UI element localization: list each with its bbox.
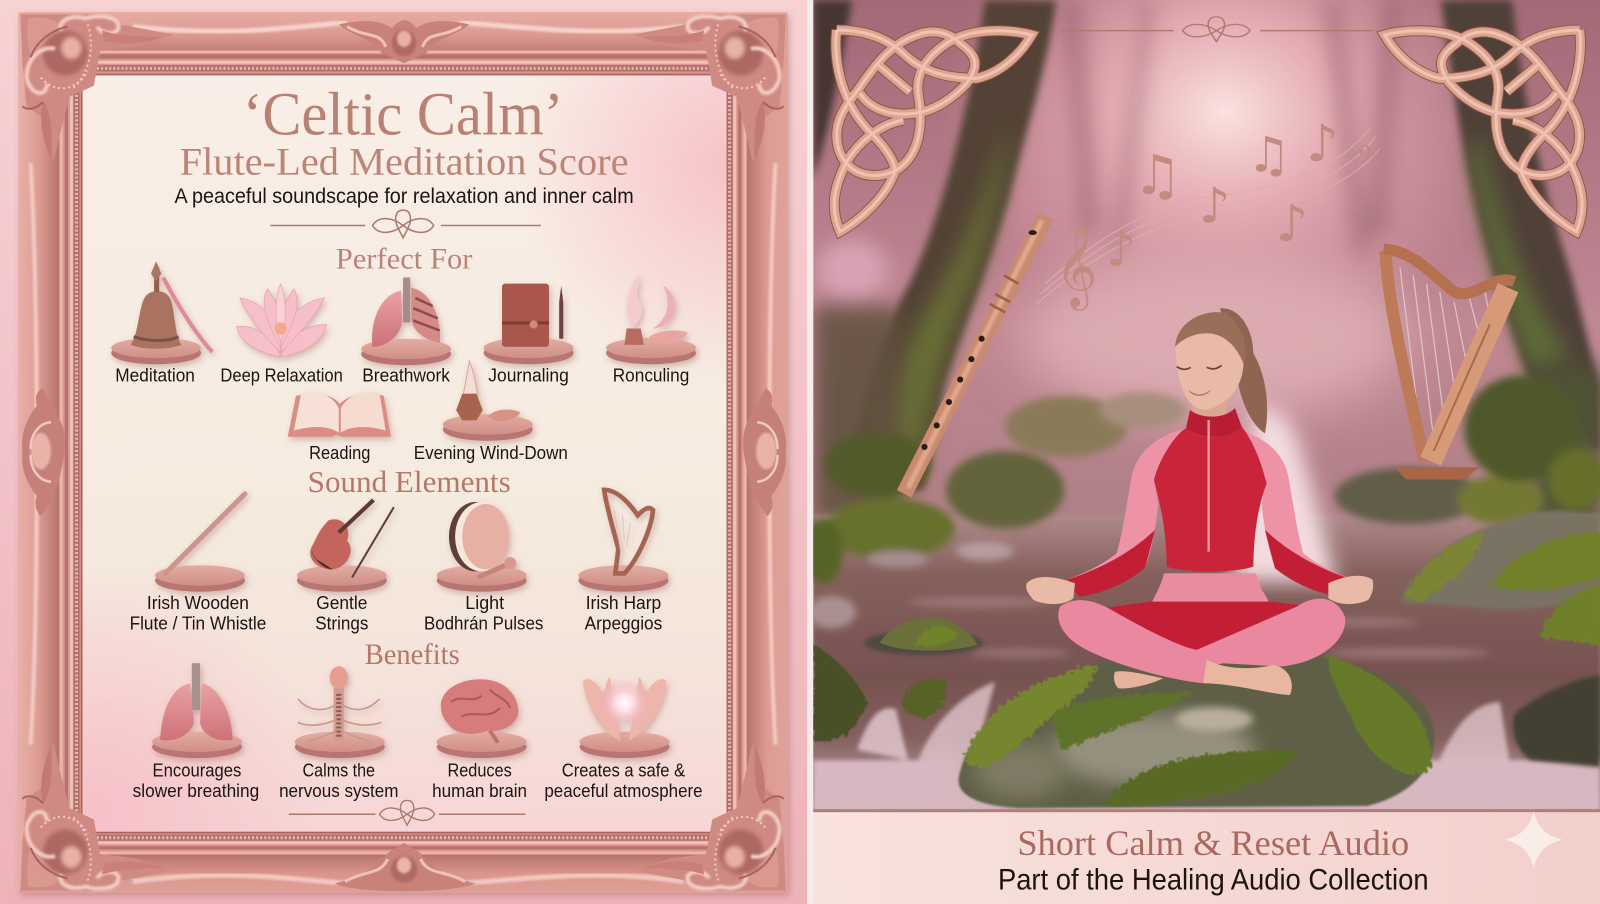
stream water: [813, 515, 1600, 811]
label: Evening Wind-Down: Evening Wind-Down: [414, 442, 568, 463]
panel: forest photo scene: [802, 0, 1600, 811]
music notes and staff: ♪: [1106, 222, 1136, 277]
music notes and staff: ♫: [1247, 126, 1291, 183]
icon: small harp: [579, 490, 668, 592]
foreground right rock: [1513, 675, 1600, 767]
floating flute: [904, 216, 1046, 494]
label: Irish Harp Arpeggios: Arpeggios: [585, 613, 662, 634]
frame right ornament: [743, 388, 786, 516]
label: Reading: Reading: [309, 442, 370, 463]
frame corners: [20, 14, 786, 891]
woman meditating: [1026, 308, 1373, 695]
label: Deep Relaxation: Deep Relaxation: [220, 365, 343, 386]
icon: oil lamp: [443, 361, 533, 441]
heading: Sound Elements: Sound Elements: [308, 465, 511, 499]
icon: candle and moon: [606, 273, 696, 364]
panel: inner cream mat: [83, 76, 727, 832]
ornamental divider bottom: [289, 800, 526, 825]
tagline: A peaceful soundscape for relaxation and inner calm: [174, 184, 634, 208]
icon: violin and bow: [297, 500, 394, 592]
subtitle heading: Flute-Led Meditation Score: [180, 140, 629, 183]
label: Calms the nervous system: Calms the: [303, 759, 375, 780]
panel: ornate rose frame: [18, 12, 788, 893]
mossy rocks: [802, 375, 1600, 629]
label: Light Bodhrán Pulses: Light: [465, 592, 505, 613]
label: Breathwork: Breathwork: [362, 365, 451, 386]
right mossy boulder: [1400, 510, 1600, 645]
label: Creates a safe and peaceful atmosphere: Creates a safe &: [562, 759, 686, 780]
label: Gentle Strings: [315, 592, 368, 634]
music notes and staff: [1037, 115, 1380, 311]
frame top cartouche: [339, 20, 469, 63]
label: Irish Harp Arpeggios: Irish Harp: [586, 592, 661, 613]
label: Encourages slower breathing: Encourages: [153, 759, 241, 780]
music notes and staff: ♪: [1276, 195, 1308, 254]
icon: meditation bell: [111, 261, 212, 364]
small midstream rock: [864, 618, 983, 655]
music notes and staff: 𝄞: [1055, 224, 1097, 311]
frame left ornament: [22, 388, 65, 516]
label: Reduces human brain: [432, 759, 527, 801]
label: Irish Harp Arpeggios: [585, 592, 662, 634]
caption title: Short Calm & Reset Audio: [1017, 823, 1409, 863]
caption subtitle: Part of the Healing Audio Collection: [998, 864, 1429, 897]
tree trunks: [813, 0, 1600, 531]
ornamental divider top: [270, 210, 541, 238]
icon: brain: [437, 679, 527, 758]
icon: nervous system: [295, 666, 385, 758]
icon: cupped hands with glow: [580, 677, 669, 758]
label: Encourages slower breathing: slower breathing: [133, 780, 259, 801]
music notes and staff: ♪: [1306, 115, 1339, 174]
white gutter: [807, 0, 814, 904]
music notes and staff: 𝄢: [1355, 140, 1377, 180]
label: Creates a safe and peaceful atmosphere: [544, 759, 703, 801]
forest background: [813, 0, 1600, 811]
celtic knot top-left: [834, 30, 1032, 232]
icon: open book: [288, 392, 391, 437]
music notes and staff: ♪: [1199, 177, 1230, 234]
left page background: [0, 0, 807, 904]
heading: Benefits: Benefits: [365, 639, 460, 671]
icon: breathwork lungs: [361, 278, 451, 365]
label: Irish Wooden Flute / Tin Whistle: Flute / Tin Whistle: [130, 613, 266, 634]
icon: lotus: [237, 284, 327, 357]
title: ‘Celtic Calm’: [243, 81, 563, 149]
frame bottom cartouche: [335, 843, 476, 891]
label: Calms the nervous system: nervous system: [279, 780, 398, 801]
boulder under figure: [959, 649, 1434, 808]
label: Journaling: Journaling: [488, 365, 569, 386]
label: Ronculing: Ronculing: [613, 365, 689, 386]
label: Reduces human brain: Reduces: [447, 759, 512, 780]
label: Meditation: Meditation: [115, 365, 195, 386]
celtic knot top-right: [1385, 30, 1582, 232]
distant waterfall: [1230, 407, 1337, 582]
top ornament: [1061, 17, 1372, 42]
label: Irish Wooden Flute / Tin Whistle: [130, 592, 266, 634]
icon: wooden flute: [155, 494, 245, 592]
label: Light Bodhrán Pulses: [424, 592, 543, 634]
icon: sparkle star: [1505, 811, 1562, 868]
label: Reduces human brain: human brain: [432, 780, 527, 801]
label: Light Bodhrán Pulses: Bodhrán Pulses: [424, 613, 543, 634]
icon: lungs: [152, 663, 242, 758]
foreground left rocks: [813, 645, 947, 742]
music notes and staff: ♫: [1133, 143, 1182, 207]
foreground waterfalls: [813, 682, 1600, 811]
label: Irish Wooden Flute / Tin Whistle: Irish Wooden: [147, 592, 249, 613]
floating harp: [1384, 249, 1514, 480]
label: Calms the nervous system: [279, 759, 398, 801]
label: Creates a safe and peaceful atmosphere: peaceful atmosphere: [544, 780, 703, 801]
heading: Perfect For: Perfect For: [336, 243, 473, 275]
panel: bottom caption band: [813, 809, 1600, 904]
icon: journal and pen: [484, 284, 573, 364]
label: Gentle Strings: Gentle: [316, 592, 367, 613]
icon: bodhran drum: [437, 502, 527, 592]
label: Gentle Strings: Strings: [315, 613, 368, 634]
label: Encourages slower breathing: [133, 759, 259, 801]
